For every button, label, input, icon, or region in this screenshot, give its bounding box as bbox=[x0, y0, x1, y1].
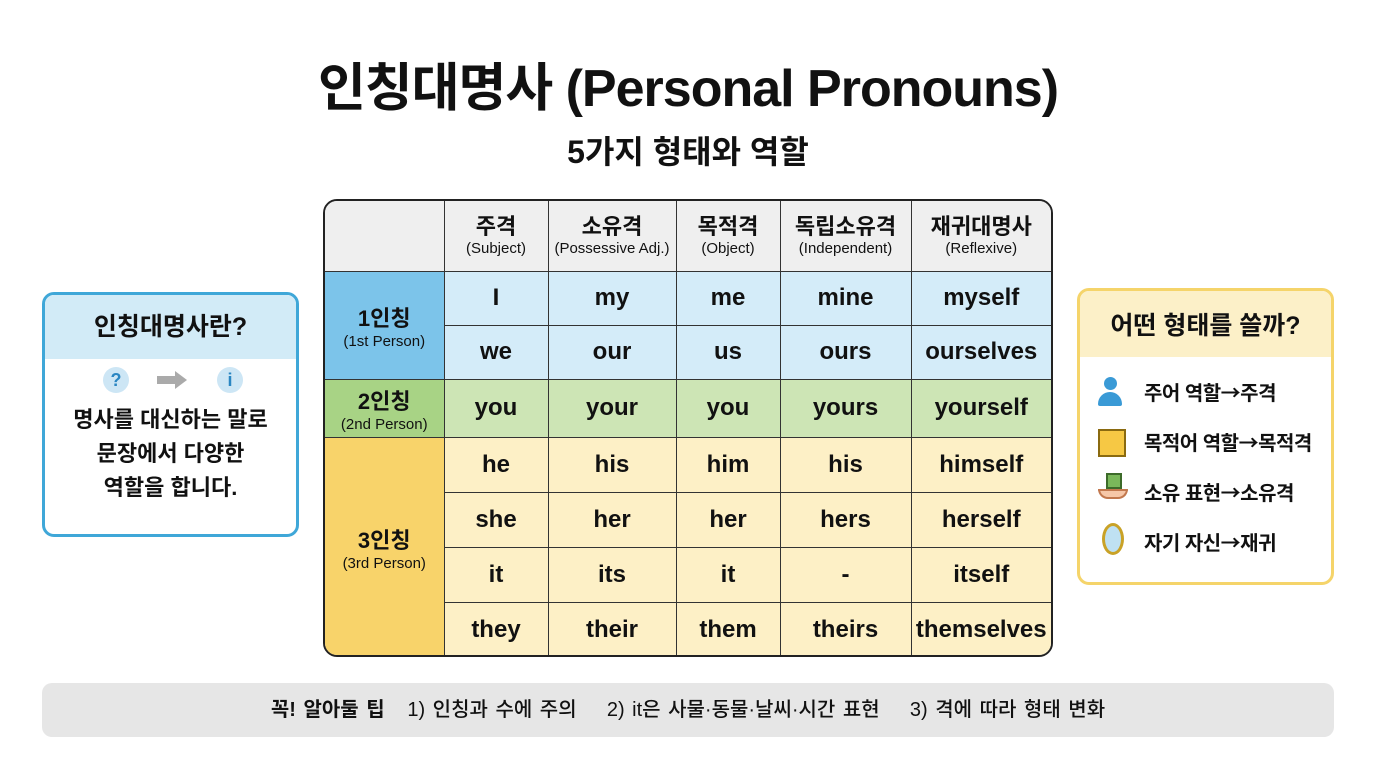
pronoun table: 1인칭 bbox=[358, 306, 411, 330]
usage heading bbox=[1080, 291, 1331, 357]
panel: usage: 소유 표현→소유격 bbox=[1144, 477, 1294, 506]
pronoun table: (3rd Person) bbox=[343, 554, 426, 572]
icons row: ? bbox=[110, 370, 122, 390]
pronoun table: his bbox=[828, 450, 863, 478]
pronoun table: me bbox=[711, 284, 745, 311]
pronoun table: 독립소유격 bbox=[795, 214, 896, 239]
pronoun table: herself bbox=[942, 506, 1021, 532]
pronoun table: 목적격 bbox=[698, 214, 758, 239]
usage list bbox=[1098, 377, 1312, 556]
definition text: 역할을 합니다. bbox=[104, 475, 237, 500]
panel: usage: 주어 역할→주격 bbox=[1144, 377, 1276, 406]
pronoun table: hers bbox=[820, 506, 871, 532]
panel: usage: 자기 자신→재귀 bbox=[1144, 527, 1276, 556]
pronoun table: it bbox=[489, 560, 503, 588]
subtitle: 5가지 형태와 역할 bbox=[567, 134, 809, 170]
pronoun table: (Object) bbox=[701, 240, 755, 257]
tips bar bbox=[42, 683, 1334, 737]
pronoun table: my bbox=[595, 284, 629, 311]
pronoun table: - bbox=[842, 560, 850, 588]
pronoun table: 소유격 bbox=[582, 214, 642, 239]
pronoun table: (Subject) bbox=[466, 240, 526, 257]
pronoun table: 재귀대명사 bbox=[931, 214, 1032, 239]
pronoun table: (2nd Person) bbox=[341, 416, 428, 432]
tips bar: 꼭! 알아둘 팁 1) 인칭과 수에 주의 2) it은 사물·동물·날씨·시간 표현 3) 격에 따라 형태 변화 bbox=[271, 699, 1105, 721]
pronoun table: we bbox=[480, 338, 512, 365]
pronoun table: myself bbox=[943, 284, 1019, 311]
panel heading: 인칭대명사란? bbox=[94, 313, 247, 341]
pronoun table: (Independent) bbox=[799, 240, 892, 257]
pronoun table: you bbox=[475, 394, 517, 421]
pronoun table: his bbox=[595, 450, 629, 478]
panel: usage bbox=[1077, 288, 1334, 585]
pronoun table: their bbox=[586, 616, 638, 643]
pronoun table: yourself bbox=[935, 394, 1028, 421]
pronoun table: her bbox=[593, 506, 631, 532]
pronoun table: us bbox=[714, 338, 742, 365]
pronoun table: theirs bbox=[813, 616, 878, 643]
pronoun table: 3인칭 bbox=[358, 528, 411, 552]
pronoun table: (1st Person) bbox=[343, 332, 425, 350]
usage heading: 어떤 형태를 쓸까? bbox=[1110, 312, 1301, 340]
pronoun table: 2인칭 bbox=[358, 388, 411, 414]
pronoun table: she bbox=[475, 506, 517, 532]
definition text: 명사를 대신하는 말로 bbox=[73, 407, 268, 432]
pronoun table: I bbox=[493, 284, 499, 311]
pronoun table: her bbox=[709, 506, 747, 532]
pronoun table: ours bbox=[819, 338, 872, 365]
pronoun table: our bbox=[593, 338, 631, 365]
pronoun table: they bbox=[471, 616, 521, 643]
pronoun table: itself bbox=[953, 560, 1009, 588]
definition text bbox=[73, 407, 268, 500]
pronoun table: its bbox=[598, 560, 626, 588]
pronoun table: it bbox=[721, 560, 735, 588]
pronoun table: them bbox=[699, 616, 757, 643]
pronoun table: (Reflexive) bbox=[945, 240, 1017, 257]
panel heading bbox=[45, 295, 296, 359]
pronoun table: him bbox=[707, 450, 749, 478]
pronoun table: mine bbox=[817, 284, 874, 311]
pronoun table: themselves bbox=[916, 616, 1047, 643]
panel: usage: 목적어 역할→목적격 bbox=[1144, 427, 1312, 456]
definition text: 문장에서 다양한 bbox=[97, 441, 244, 466]
pronoun table: yours bbox=[813, 394, 878, 421]
pronoun table: 주격 bbox=[476, 214, 516, 239]
pronoun table: ourselves bbox=[925, 338, 1037, 365]
title: 인칭대명사 (Personal Pronouns) bbox=[318, 60, 1058, 118]
icons row bbox=[103, 367, 243, 393]
pronoun table: your bbox=[586, 394, 638, 421]
icons row: i bbox=[227, 370, 232, 390]
pronoun table bbox=[323, 199, 1053, 657]
pronoun table: you bbox=[707, 394, 749, 421]
pronoun table: he bbox=[482, 450, 510, 478]
panel: definition bbox=[42, 292, 299, 537]
pronoun table: (Possessive Adj.) bbox=[554, 240, 670, 257]
pronoun table: himself bbox=[939, 450, 1023, 478]
